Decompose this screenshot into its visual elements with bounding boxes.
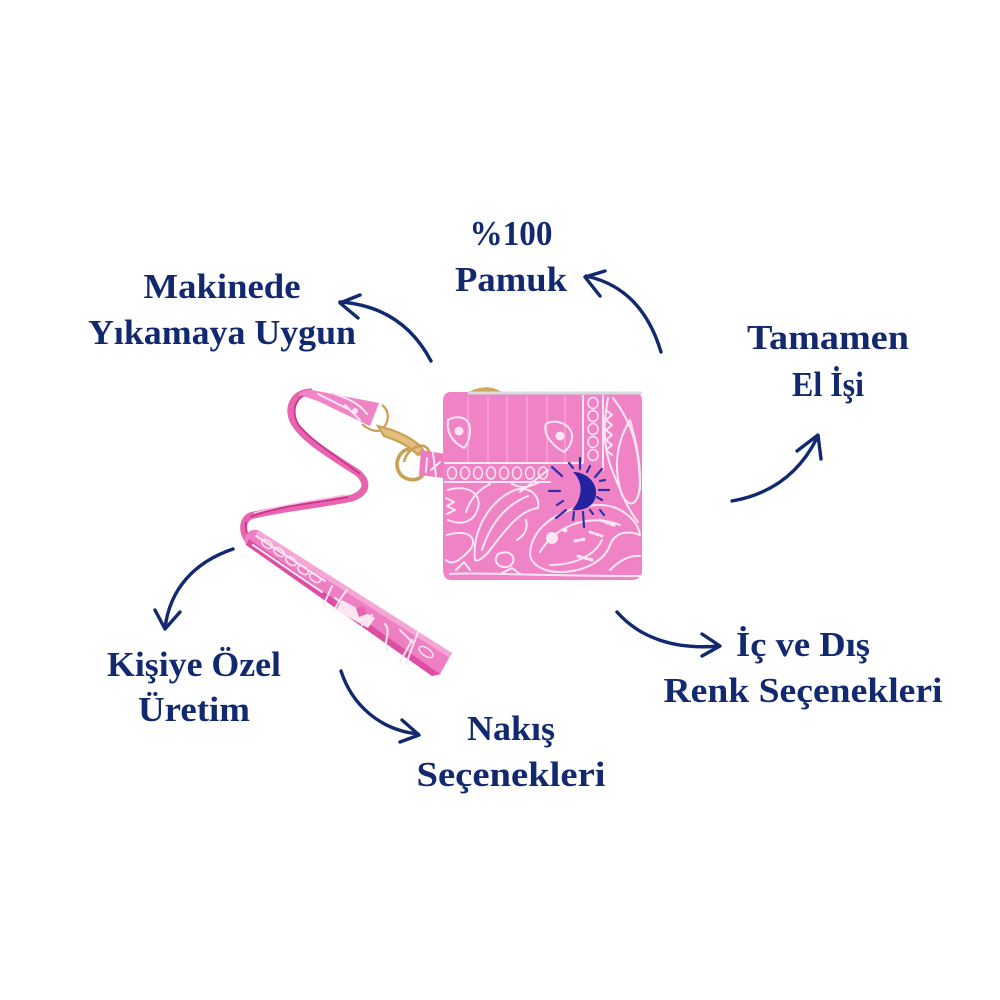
label: İç ve Dış Renk Seçenekleri: [664, 625, 943, 710]
arrow: to Tamamen El İşi: [732, 435, 821, 501]
label: Tamamen El İşi: [747, 318, 909, 404]
pouch tab: [419, 450, 446, 478]
label: Tamamen El İşi: El İşi: [792, 365, 864, 404]
label: Nakış Seçenekleri: [416, 709, 606, 794]
wrist strap: [244, 390, 452, 676]
label: Makinede Yıkamaya Uygun: Makinede: [144, 267, 300, 306]
arrow: to %100 Pamuk: [585, 271, 661, 352]
label: Nakış Seçenekleri: Seçenekleri: [416, 755, 606, 794]
arrow: to Makinede Yıkamaya Uygun: [340, 295, 431, 361]
gold clasp and ring: [362, 405, 429, 480]
label: Makinede Yıkamaya Uygun: Yıkamaya Uygun: [88, 313, 356, 352]
label: Nakış Seçenekleri: Nakış: [467, 709, 555, 748]
label: Kişiye Özel Üretim: Kişiye Özel: [107, 645, 281, 684]
label: İç ve Dış Renk Seçenekleri: Renk Seçenekleri: [664, 671, 943, 710]
bandana pattern: [445, 396, 640, 576]
label: %100 Pamuk: %100: [470, 214, 552, 253]
arrow: to Nakış Seçenekleri: [341, 671, 419, 742]
embroidered moon and sun rays: [549, 458, 609, 527]
arrow: to İç ve Dış Renk Seçenekleri: [617, 612, 720, 656]
pouch body: [443, 392, 642, 580]
label: %100 Pamuk: Pamuk: [455, 260, 568, 299]
label: Tamamen El İşi: Tamamen: [747, 318, 909, 357]
zipper pull: [468, 387, 502, 392]
label: Kişiye Özel Üretim: Üretim: [138, 690, 250, 729]
arrow: to Kişiye Özel Üretim: [155, 549, 233, 629]
label: Makinede Yıkamaya Uygun: [88, 267, 356, 352]
label: İç ve Dış Renk Seçenekleri: İç ve Dış: [736, 625, 870, 664]
label: %100 Pamuk: [455, 214, 568, 299]
label: Kişiye Özel Üretim: [107, 645, 281, 729]
zipper edge: [468, 392, 642, 394]
